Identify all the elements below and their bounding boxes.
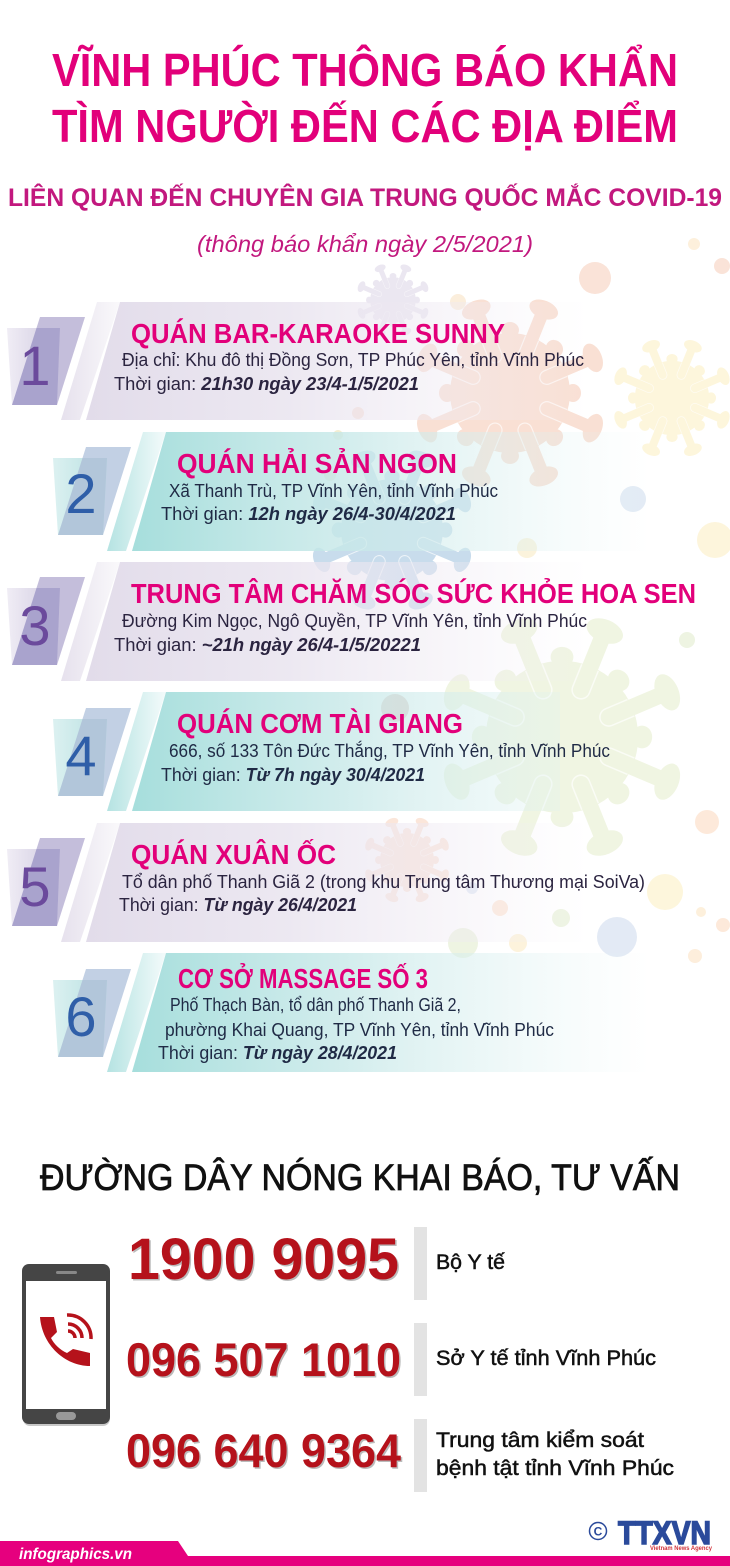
floating dots — [324, 238, 730, 963]
virus: orange large — [413, 296, 607, 490]
subtitle: LIÊN QUAN ĐẾN CHUYÊN GIA TRUNG QUỐC MẮC COVID-19 — [8, 182, 722, 212]
hotline 3: Trung tâm kiểm soát — [436, 1429, 644, 1452]
panel: location 1 — [7, 302, 600, 420]
title: TÌM NGƯỜI ĐẾN CÁC ĐỊA ĐIỂM — [52, 100, 678, 152]
panel: location 4: 4 — [65, 724, 97, 787]
hotline 2: 096 507 1010 — [126, 1333, 401, 1386]
logo: TTXVN: TTXVN — [618, 1515, 711, 1551]
footer bar — [0, 1541, 730, 1566]
panel: location 1: Địa chỉ: Khu đô thị Đồng Sơn, TP Phúc Yên, tỉnh Vĩnh Phúc — [122, 349, 584, 370]
logo: TTXVN — [590, 1515, 713, 1552]
hotline 3 — [126, 1419, 674, 1492]
hotline 2 — [126, 1323, 656, 1396]
panel: location 2: QUÁN HẢI SẢN NGON — [177, 447, 457, 479]
title: VĨNH PHÚC THÔNG BÁO KHẨN — [52, 44, 678, 96]
panel: location 4 — [53, 692, 610, 811]
panel: location 4: QUÁN CƠM TÀI GIANG — [177, 708, 463, 739]
hotline 1: 1900 9095 — [128, 1227, 399, 1292]
panel: location 6: phường Khai Quang, TP Vĩnh Yên, tỉnh Vĩnh Phúc — [165, 1019, 554, 1040]
panel: location 5: Tổ dân phố Thanh Giã 2 (trong khu Trung tâm Thương mại SoiVa) — [122, 871, 645, 892]
panel: location 5: Thời gian: Từ ngày 26/4/2021 — [119, 894, 357, 915]
hotline 2: 096 507 1010 — [128, 1334, 402, 1388]
virus: blue — [310, 447, 474, 613]
hotline 2: Sở Y tế tỉnh Vĩnh Phúc — [436, 1347, 656, 1370]
background viruses and dots — [310, 238, 730, 963]
panel: location 1: Thời gian: 21h30 ngày 23/4-1/5/2021 — [114, 373, 419, 394]
logo: TTXVN: C — [594, 1524, 603, 1538]
panel: location 5: 5 — [19, 855, 51, 918]
virus: orange small — [363, 816, 451, 904]
panel: location 3: Đường Kim Ngọc, Ngô Quyền, TP Vĩnh Yên, tỉnh Vĩnh Phúc — [122, 610, 587, 631]
panel: location 1: 1 — [19, 334, 51, 397]
panel: location 2 — [53, 432, 650, 551]
panel: location 1: QUÁN BAR-KARAOKE SUNNY — [131, 318, 505, 349]
virus: green large — [439, 613, 685, 861]
panel: location 3: Thời gian: ~21h ngày 26/4-1/5/20221 — [114, 634, 421, 655]
panel: location 6: Phố Thạch Bàn, tổ dân phố Thanh Giã 2, — [170, 994, 461, 1015]
hotline 3: 096 640 9364 — [128, 1426, 402, 1478]
virus: purple small — [356, 263, 430, 337]
hotline 1: Bộ Y tế — [436, 1251, 505, 1274]
hotline 1 — [128, 1227, 505, 1300]
hotline heading: ĐƯỜNG DÂY NÓNG KHAI BÁO, TƯ VẤN — [40, 1157, 680, 1198]
date note: (thông báo khẩn ngày 2/5/2021) — [197, 231, 533, 257]
panel: location 4: 666, số 133 Tôn Đức Thắng, TP Vĩnh Yên, tỉnh Vĩnh Phúc — [169, 740, 610, 761]
hotline 1: 1900 9095 — [130, 1228, 400, 1294]
panel: location 4: Thời gian: Từ 7h ngày 30/4/2021 — [161, 764, 425, 785]
panel: location 2: Xã Thanh Trù, TP Vĩnh Yên, tỉnh Vĩnh Phúc — [169, 480, 498, 501]
panel: location 5: QUÁN XUÂN ỐC — [131, 838, 336, 870]
virus: yellow — [612, 338, 730, 458]
logo: TTXVN: Vietnam News Agency — [650, 1546, 713, 1552]
title — [52, 44, 678, 152]
hotline 3: 096 640 9364 — [126, 1424, 401, 1477]
panel: location 5 — [7, 823, 645, 942]
icon: phone — [22, 1264, 110, 1426]
footer bar: infographics.vn — [19, 1546, 132, 1563]
panel: location 6 — [53, 953, 650, 1072]
panel: location 3: 3 — [19, 594, 51, 657]
panel: location 6: Thời gian: Từ ngày 28/4/2021 — [158, 1042, 397, 1063]
panel: location 2: Thời gian: 12h ngày 26/4-30/4/2021 — [161, 503, 456, 524]
panel: location 3 — [7, 562, 696, 681]
panel: location 6: CƠ SỞ MASSAGE SỐ 3 — [178, 962, 428, 994]
panel: location 2: 2 — [65, 462, 97, 525]
panel: location 6: 6 — [65, 985, 97, 1048]
hotline 3: bệnh tật tỉnh Vĩnh Phúc — [436, 1457, 674, 1480]
